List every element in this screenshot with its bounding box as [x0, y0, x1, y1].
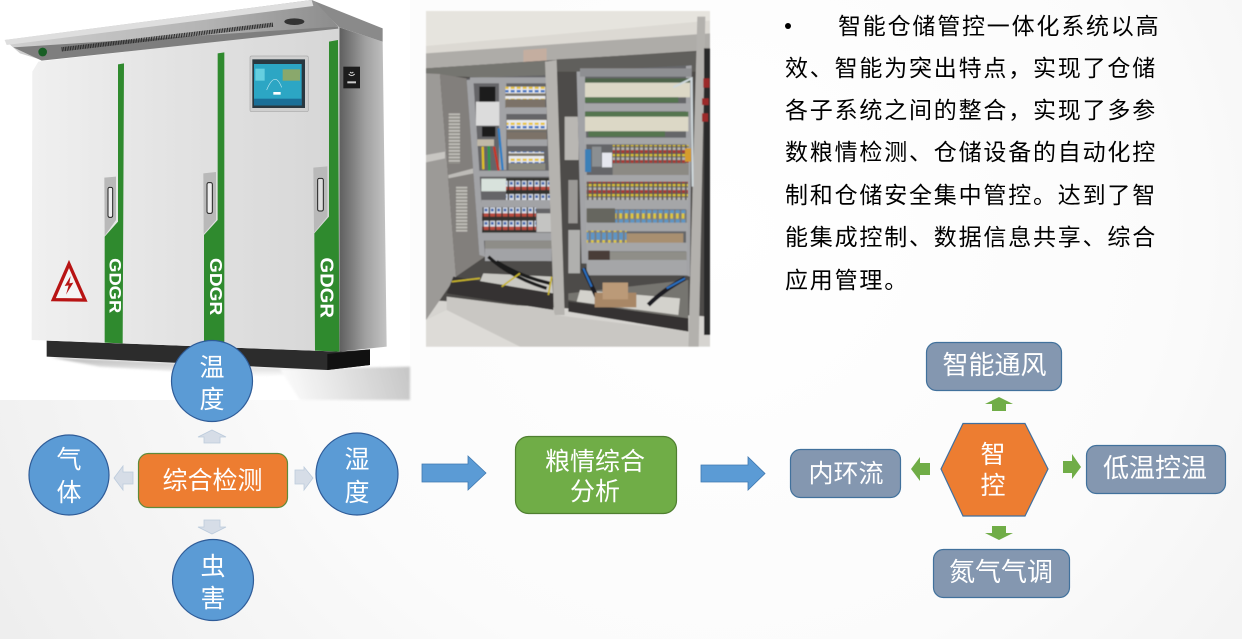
- text block: system description: 智能仓储管控一体化系统以高: [838, 13, 1160, 39]
- box: smart ventilation: [926, 342, 1062, 390]
- box: grain condition analysis: 分析: [570, 478, 620, 506]
- circle: temperature: [172, 340, 252, 422]
- arrow: right to humidity: [295, 467, 313, 490]
- brand label GDGR: [106, 257, 338, 319]
- box: smart ventilation: 智能通风: [942, 350, 1047, 380]
- hexagon: intelligent control: 控: [980, 472, 1006, 500]
- arrow: left to circulation: [911, 457, 930, 481]
- circle: gas: [29, 435, 109, 515]
- box: comprehensive detection: [138, 454, 288, 508]
- circle: pests: 虫: [200, 553, 226, 581]
- circle: temperature: 温: [199, 354, 225, 382]
- circle: pests: 害: [200, 585, 226, 613]
- box: comprehensive detection: 综合检测: [162, 467, 263, 495]
- text block: system description: 制和仓储安全集中管控。达到了智: [785, 182, 1157, 208]
- photo: open electrical control cabinet: [426, 11, 710, 347]
- arrow: down to nitrogen: [985, 526, 1013, 540]
- circle: gas: 气: [56, 446, 82, 474]
- box: nitrogen atmosphere control: 氮气气调: [949, 557, 1053, 587]
- arrow: right to low temperature: [1063, 454, 1081, 479]
- circle: temperature: 度: [199, 386, 225, 414]
- arrow: up to temperature: [198, 430, 226, 443]
- box: low temperature control: 低温控温: [1103, 453, 1207, 483]
- text block: system description: [785, 13, 1160, 293]
- arrow: up to ventilation: [985, 397, 1013, 411]
- arrow: down to pests: [198, 520, 226, 534]
- text block: system description: 效、智能为突出特点，实现了仓储: [785, 55, 1157, 81]
- flow stage: comprehensive detection: [29, 340, 398, 620]
- box: grain condition analysis: 粮情综合: [545, 448, 645, 476]
- arrow: detection to analysis: [422, 456, 486, 490]
- text block: system description: 数粮情检测、仓储设备的自动化控: [785, 139, 1157, 165]
- arrow: analysis to control: [701, 457, 765, 490]
- box: grain condition analysis: [516, 436, 676, 514]
- brand label GDGR: GDGR: [106, 258, 125, 313]
- circle: humidity: 湿: [344, 446, 370, 474]
- text block: system description: 能集成控制、数据信息共享、综合: [785, 224, 1157, 250]
- circle: pests: [172, 540, 254, 620]
- brand label GDGR: GDGR: [206, 258, 226, 316]
- hexagon: intelligent control: [941, 424, 1048, 516]
- icon: high-voltage warning: [53, 264, 85, 300]
- circle: humidity: 度: [344, 479, 370, 507]
- text block: system description: 各子系统之间的整合，实现了多参: [785, 97, 1157, 123]
- circle: gas: 体: [56, 479, 82, 507]
- product photo: grain storage control cabinet: [0, 0, 410, 400]
- box: internal circulation: 内环流: [808, 460, 884, 488]
- box: low temperature control: [1086, 446, 1226, 494]
- touch screen: [250, 56, 308, 112]
- hexagon: intelligent control: 智: [980, 441, 1006, 469]
- brand label GDGR: GDGR: [317, 257, 338, 319]
- flow stage: intelligent control: [790, 342, 1226, 598]
- text block: system description: 应用管理。: [785, 267, 909, 293]
- box: nitrogen atmosphere control: [934, 550, 1070, 598]
- box: internal circulation: [790, 450, 900, 498]
- arrow: left to gas: [114, 466, 133, 490]
- circle: humidity: [316, 433, 398, 515]
